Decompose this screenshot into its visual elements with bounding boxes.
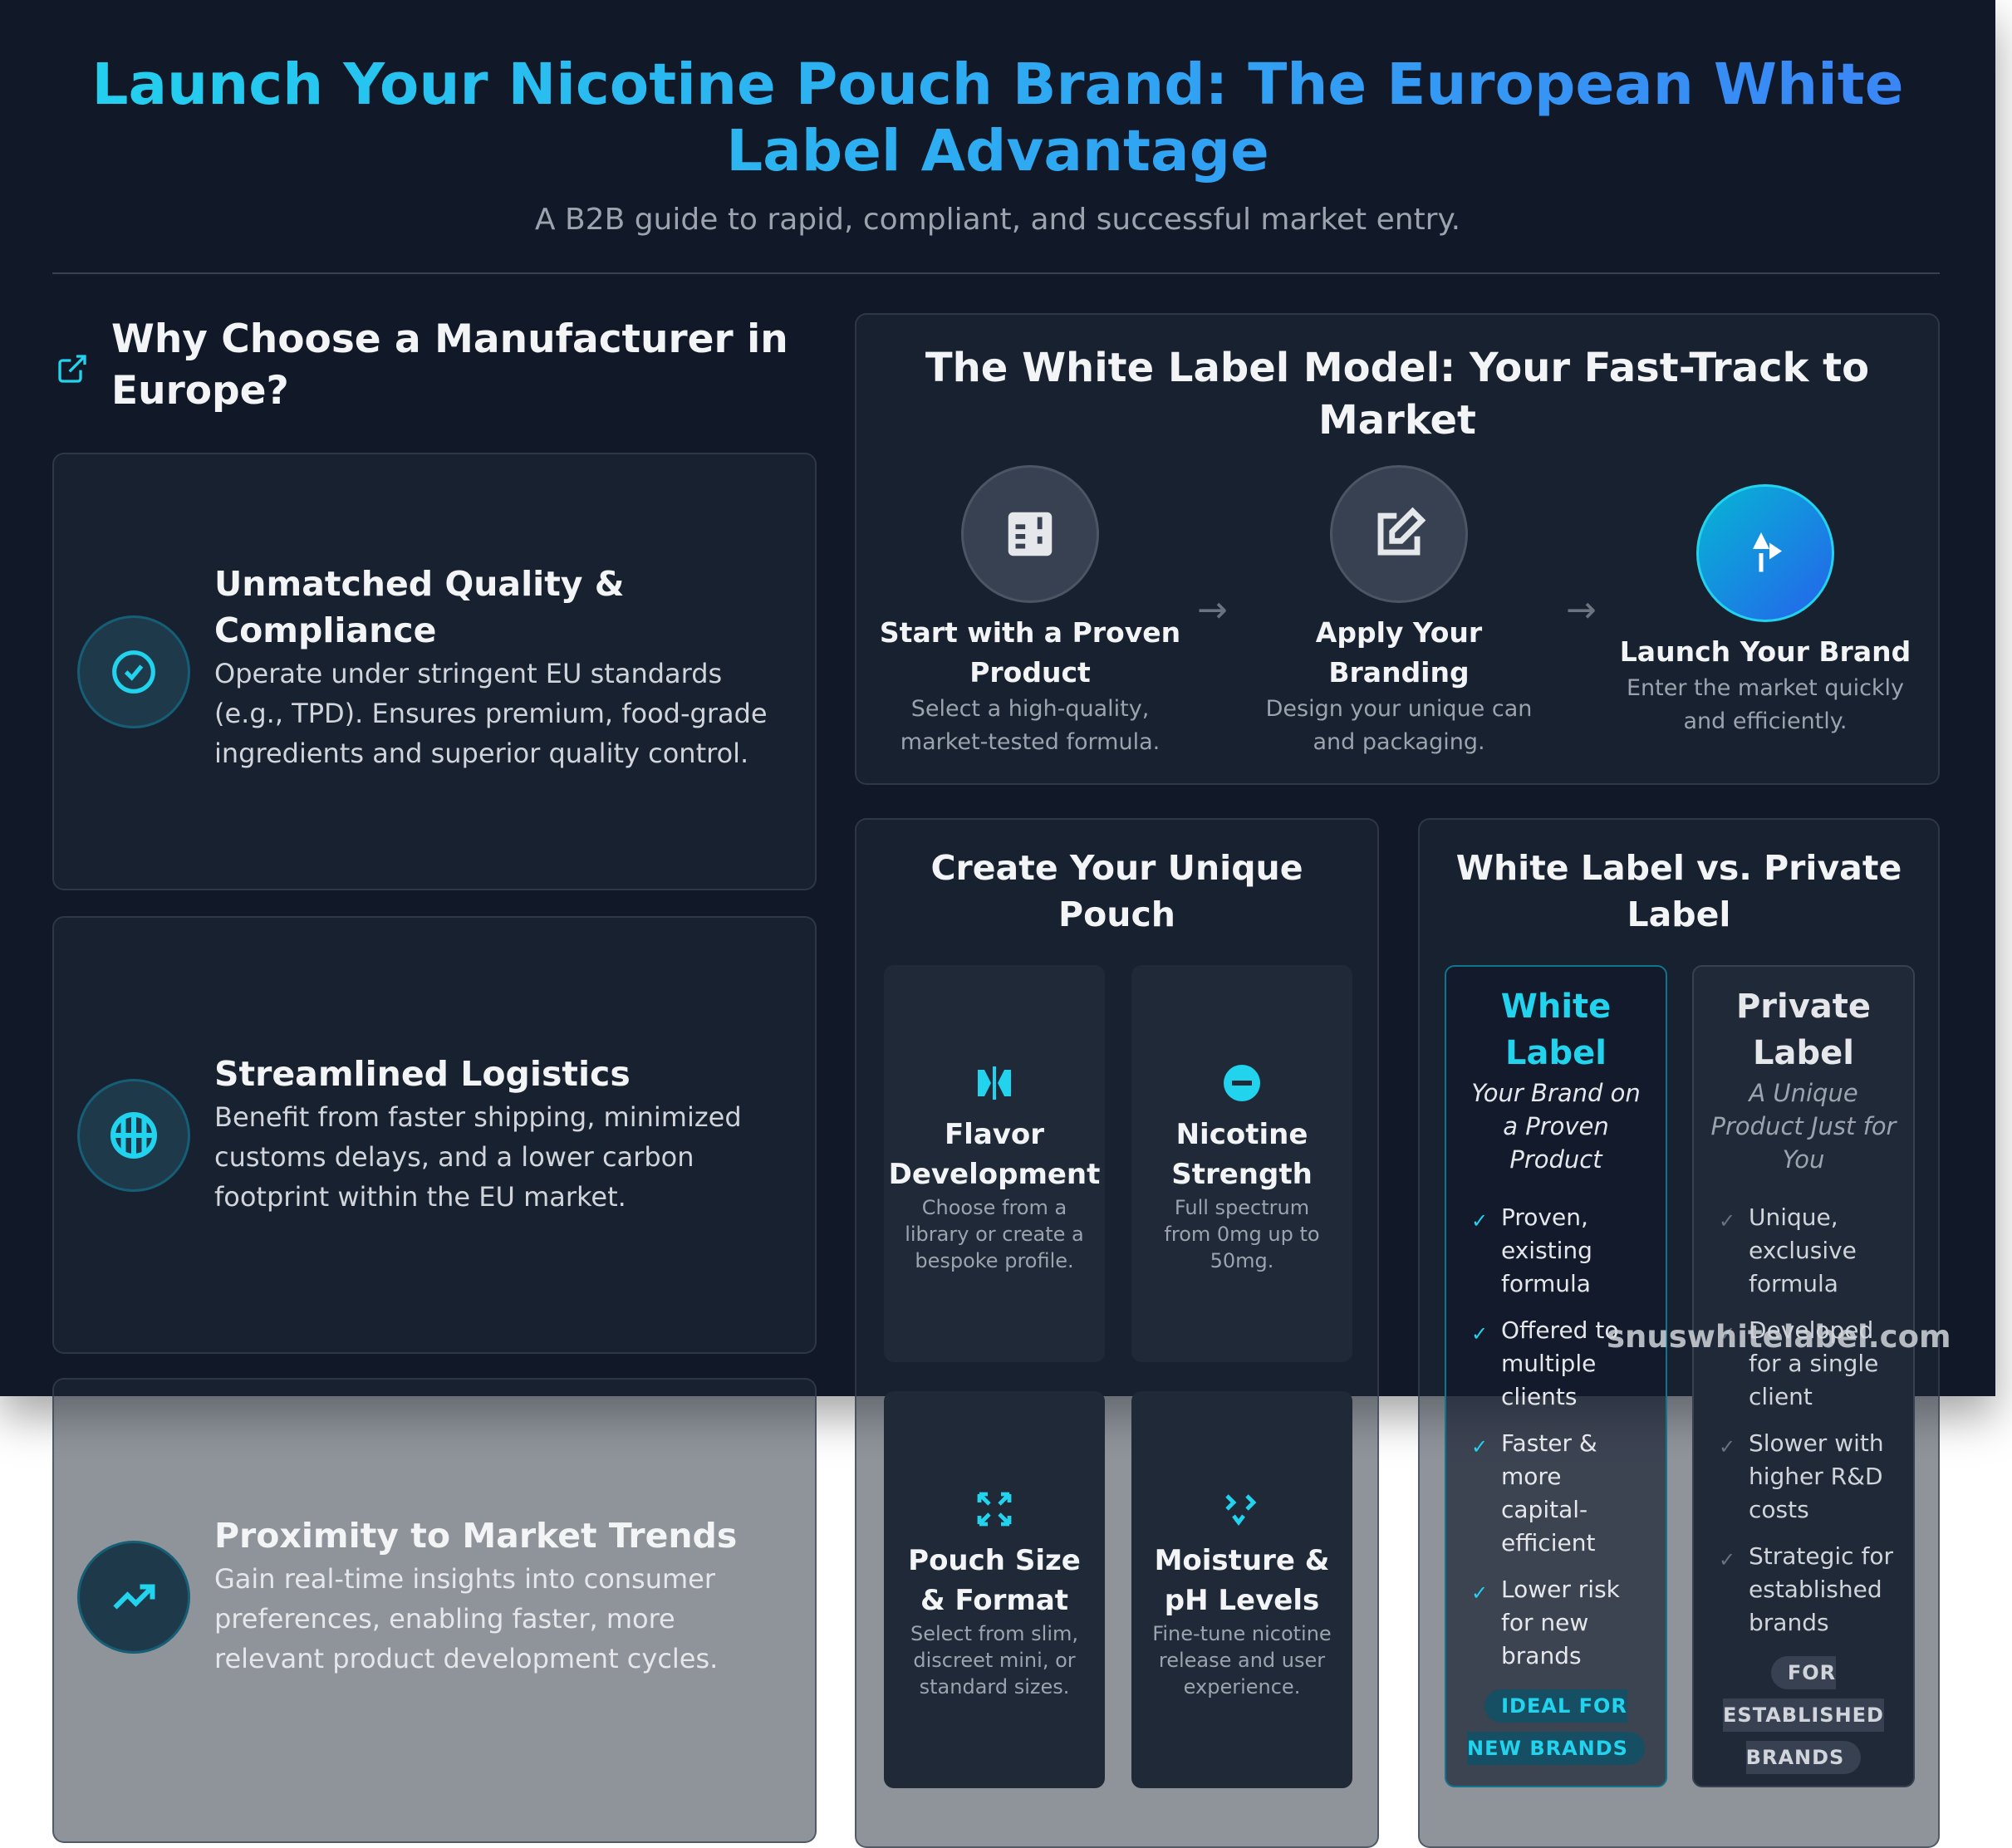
tile: size: Select from slim, discreet mini, or standard sizes.: [910, 1622, 1078, 1698]
icon: check circle: [77, 615, 190, 728]
tile: nicotine: Nicotine Strength: [1171, 1118, 1313, 1191]
panel: trends: Gain real-time insights into consumer preferences, enabling faster, more relevant product development cycles.: [214, 1563, 718, 1674]
heading: why europe: Why Choose a Manufacturer in Europe?: [111, 316, 788, 414]
heading: The White Label Model: Your Fast-Track to Market: [925, 345, 1869, 444]
step 1: Select a high-quality, market-tested formula.: [900, 696, 1160, 755]
tile: size: [884, 1391, 1105, 1788]
step 2: [1266, 465, 1532, 755]
card: private label: Unique, exclusive formula: [1749, 1203, 1857, 1297]
tile: flavor: [884, 965, 1105, 1362]
icon: external link: [58, 355, 86, 383]
step 2: Design your unique can and packaging.: [1266, 696, 1532, 755]
step 3: Enter the market quickly and efficiently.: [1627, 675, 1904, 734]
step 3: Launch Your Brand: [1620, 635, 1911, 668]
card: white label: Your Brand on a Proven Product: [1471, 1079, 1641, 1174]
tile: size: Pouch Size & Format: [908, 1544, 1081, 1617]
arrow: →: [1197, 589, 1228, 631]
card: white label: White Label: [1501, 988, 1611, 1072]
tile: nicotine: Full spectrum from 0mg up to 50mg.: [1164, 1196, 1320, 1272]
tile: moisture: Fine-tune nicotine release and user experience.: [1152, 1622, 1332, 1698]
tile: flavor: Choose from a library or create a bespoke profile.: [905, 1196, 1084, 1272]
step 2: Apply Your Branding: [1316, 616, 1482, 689]
tile: moisture: [1131, 1391, 1352, 1788]
icon: trend: [77, 1541, 190, 1654]
icon: globe: [77, 1079, 190, 1192]
subtitle: A B2B guide to rapid, compliant, and successful market entry.: [535, 203, 1460, 237]
arrow: →: [1566, 589, 1597, 631]
heading: Create Your Unique Pouch: [930, 848, 1303, 934]
badge: for established brands: FOR ESTABLISHED BRANDS: [1723, 1661, 1884, 1769]
step 1: [880, 465, 1180, 755]
tile: flavor: Flavor Development: [889, 1118, 1100, 1191]
panel: white label model: [855, 313, 1940, 785]
step 1: Start with a Proven Product: [880, 616, 1180, 689]
card: white label: Proven, existing formula: [1501, 1203, 1592, 1297]
card: private label: [1692, 965, 1915, 1787]
step 3: [1620, 484, 1911, 734]
panel: trends: Proximity to Market Trends: [214, 1516, 737, 1556]
panel: quality: [52, 453, 817, 890]
panel: create your unique pouch: [855, 818, 1379, 1848]
panel: trends: [52, 1378, 817, 1843]
panel: quality: Operate under stringent EU standards (e.g., TPD). Ensures premium, food-grade ingredients and superior quality control.: [214, 658, 768, 769]
panel: logistics: Benefit from faster shipping, minimized customs delays, and a lower carbon footprint within the EU market.: [214, 1101, 742, 1213]
panel: logistics: Streamlined Logistics: [214, 1054, 631, 1094]
card: white label: [1445, 965, 1667, 1787]
card: private label: Slower with higher R&D costs: [1749, 1429, 1884, 1523]
panel: white vs private: [1418, 818, 1940, 1848]
tile: moisture: Moisture & pH Levels: [1155, 1544, 1329, 1617]
card: private label: A Unique Product Just for You: [1711, 1079, 1896, 1174]
card: white label: Offered to multiple clients: [1501, 1316, 1618, 1410]
tile: nicotine: [1131, 965, 1352, 1362]
watermark: snuswhitelabel.com: [1607, 1319, 1951, 1355]
heading: White Label vs. Private Label: [1456, 848, 1902, 934]
title: Launch Your Nicotine Pouch Brand: The European White Label Advantage: [91, 51, 1904, 184]
card: private label: Private Label: [1736, 988, 1871, 1072]
card: private label: Strategic for established brands: [1749, 1542, 1893, 1636]
card: private label: Developed for a single client: [1749, 1316, 1878, 1410]
panel: logistics: [52, 916, 817, 1354]
card: white label: Faster & more capital-efficient: [1501, 1429, 1597, 1556]
badge: ideal for new brands: IDEAL FOR NEW BRANDS: [1467, 1694, 1628, 1760]
panel: quality: Unmatched Quality & Compliance: [214, 564, 625, 650]
card: white label: Lower risk for new brands: [1501, 1576, 1620, 1669]
